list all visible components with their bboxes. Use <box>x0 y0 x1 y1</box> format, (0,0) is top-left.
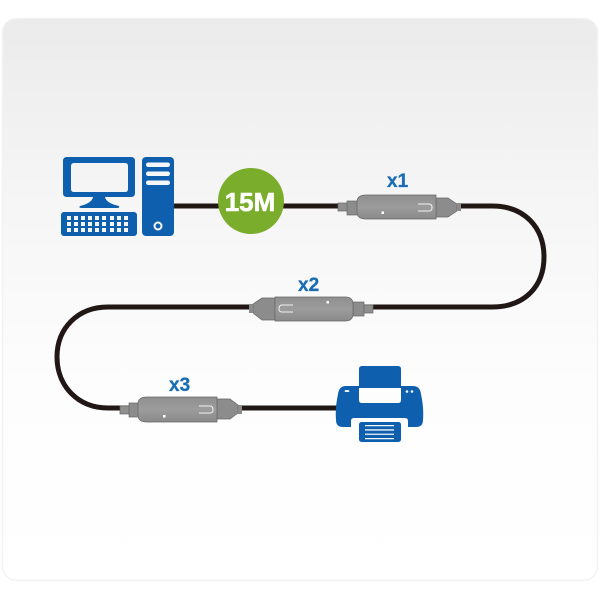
printer output tray <box>359 422 401 442</box>
label: x3: x3 <box>169 375 190 396</box>
label: x2: x2 <box>298 275 319 296</box>
monitor <box>63 157 135 197</box>
cable <box>57 206 544 408</box>
badge: 15M <box>218 168 284 234</box>
keyboard <box>61 212 137 236</box>
icon: printer <box>336 366 423 442</box>
connector x1 <box>338 195 461 219</box>
printer body <box>336 386 423 427</box>
tower <box>142 157 174 236</box>
badge: 15M: 15M <box>225 187 275 217</box>
connector x2 <box>249 297 373 321</box>
connector x3 <box>120 397 242 422</box>
monitor stand <box>79 197 119 208</box>
printer top paper <box>359 366 401 388</box>
icon: computer <box>61 157 174 236</box>
label: x1: x1 <box>387 171 409 192</box>
